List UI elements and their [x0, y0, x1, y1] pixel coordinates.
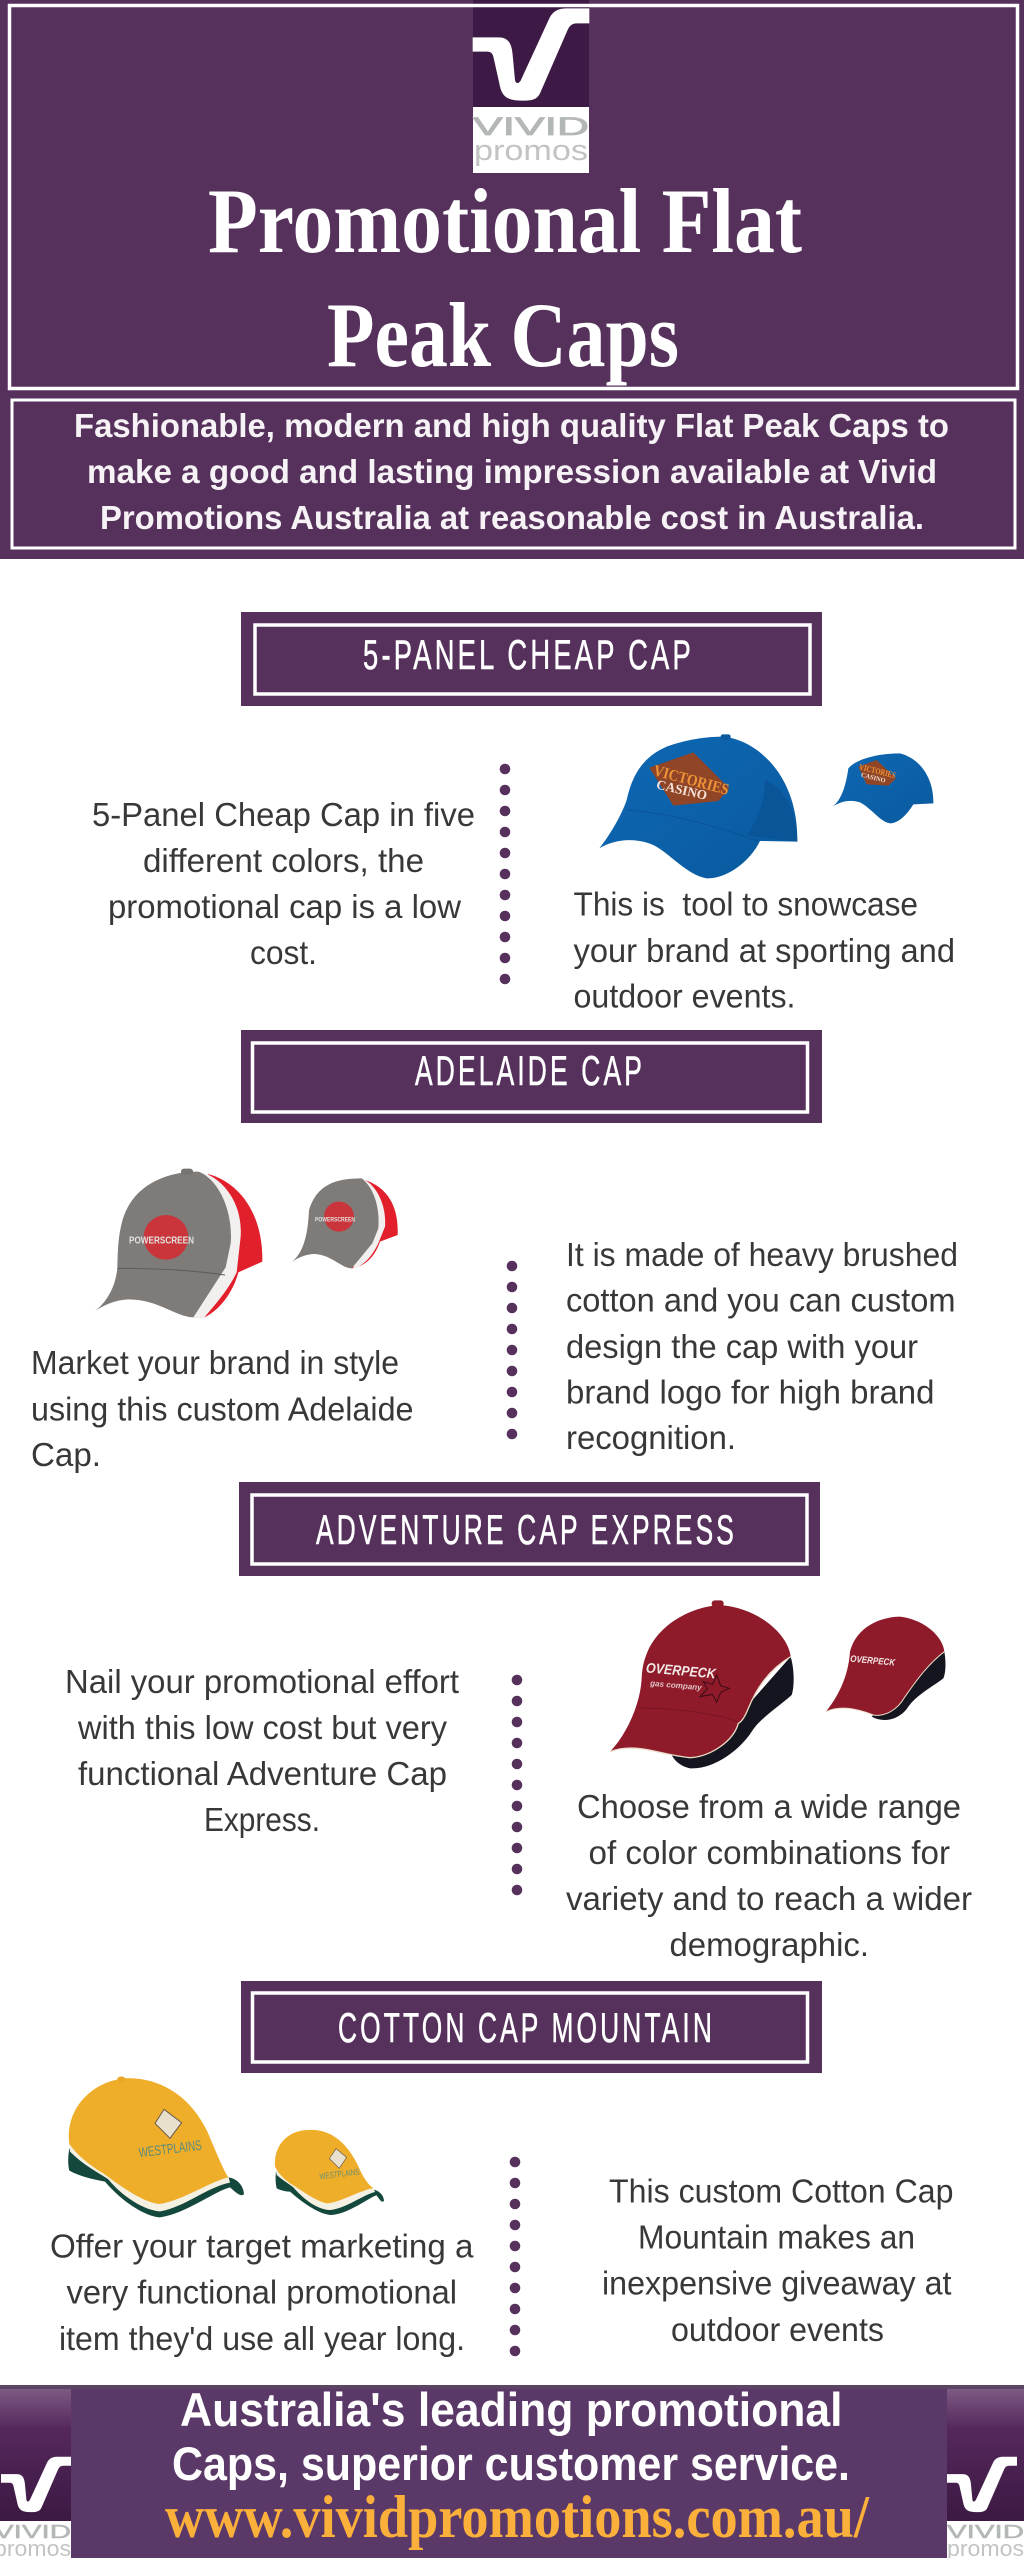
text: Adelaide left: using this custom Adelaide: [31, 1390, 414, 1428]
text: 5-Panel right: [574, 886, 955, 1014]
text: Cotton right: outdoor events: [671, 2311, 884, 2348]
text: Adelaide right: design the cap with your: [566, 1328, 918, 1365]
heading: 5-Panel Cheap Cap: [241, 612, 822, 706]
icon: grey red cap small: [292, 1178, 398, 1268]
text: Cotton left: very functional promotional: [66, 2274, 457, 2310]
icon: footer logo left: [0, 2389, 71, 2558]
footer tagline: Australia's leading promotional: [180, 2383, 842, 2436]
subtitle box: Fashionable, modern and high quality Flat Peak Caps to: [74, 407, 949, 444]
heading: Cotton Cap Mountain: COTTON CAP MOUNTAIN: [338, 2004, 715, 2051]
icon: maroon cap large: [610, 1600, 794, 1768]
icon: maroon cap small: [826, 1617, 945, 1720]
text: Adelaide right: [566, 1236, 958, 1456]
icon: maroon cap large: gas company: [649, 1679, 703, 1692]
text: 5-Panel left: promotional cap is a low: [108, 888, 461, 925]
text: Adelaide left: Market your brand in style: [31, 1344, 399, 1381]
icon: yellow cap small: WESTPLAINS: [319, 2166, 360, 2181]
dotted divider 2: [507, 1261, 517, 1439]
icon: grey red cap small: POWERSCREEN: [315, 1216, 355, 1223]
subtitle box: [12, 400, 1015, 548]
text: Adventure left: with this low cost but very: [77, 1709, 447, 1746]
text: Adelaide right: recognition.: [566, 1419, 736, 1456]
text: Cotton left: [50, 2228, 474, 2357]
footer url: www.vividpromotions.com.au/: [165, 2484, 870, 2550]
heading: Adventure Cap Express: [239, 1482, 820, 1576]
icon: Vivid Promos logo: [473, 0, 589, 173]
icon: yellow cap small: [275, 2130, 384, 2215]
icon: grey red cap large: [94, 1169, 262, 1317]
text: Adventure right: of color combinations for: [588, 1834, 950, 1871]
text: Cotton right: inexpensive giveaway at: [602, 2264, 952, 2302]
footer tagline: [172, 2383, 850, 2490]
text: Cotton left: item they'd use all year long.: [59, 2320, 465, 2357]
text: Adventure right: Choose from a wide range: [577, 1788, 961, 1825]
icon: blue cap large: CASINO: [655, 777, 709, 803]
text: 5-Panel right: your brand at sporting and: [574, 932, 955, 969]
icon: footer logo right: [947, 2389, 1024, 2558]
heading: Adventure Cap Express: ADVENTURE CAP EXPRESS: [316, 1506, 737, 1553]
text: Adelaide left: [31, 1344, 414, 1473]
title: Peak Caps: [327, 284, 679, 386]
text: Adventure right: variety and to reach a wider: [566, 1880, 972, 1917]
icon: yellow cap large: [68, 2077, 244, 2217]
icon: blue cap large: VICTORIES: [652, 762, 731, 799]
icon: footer logo right: VIVID: [947, 2522, 1024, 2542]
text: Cotton right: Mountain makes an: [638, 2218, 915, 2256]
text: Adelaide right: It is made of heavy brushed: [566, 1236, 958, 1273]
icon: grey red cap large: POWERSCREEN: [129, 1236, 194, 1247]
title: [208, 170, 802, 386]
text: Adventure left: Nail your promotional effort: [65, 1663, 459, 1700]
icon: blue cap small: VICTORIES: [858, 762, 897, 780]
text: Adelaide left: Cap.: [31, 1436, 101, 1473]
icon: Vivid Promos logo: VIVID: [473, 113, 589, 141]
dotted divider 3: [512, 1675, 522, 1895]
text: Adventure right: [566, 1788, 972, 1963]
text: Adelaide right: brand logo for high brand: [566, 1374, 934, 1410]
text: 5-Panel left: different colors, the: [143, 842, 424, 879]
icon: yellow cap large: WESTPLAINS: [138, 2137, 203, 2160]
text: Cotton right: [602, 2172, 954, 2348]
subtitle box: Promotions Australia at reasonable cost in Australia.: [100, 499, 924, 536]
text: Adelaide right: cotton and you can custom: [566, 1282, 956, 1318]
text: Cotton right: This custom Cotton Cap: [609, 2172, 954, 2210]
panel: footer: [0, 2383, 1024, 2558]
heading: Adelaide Cap: [241, 1030, 822, 1123]
icon: blue cap small: CASINO: [860, 772, 886, 785]
header outer frame: [10, 6, 1018, 388]
text: Adventure left: Express.: [204, 1801, 320, 1838]
text: Adventure left: functional Adventure Cap: [78, 1755, 447, 1792]
icon: maroon cap large: OVERPECK: [645, 1659, 717, 1681]
icon: blue cap small: [832, 753, 933, 823]
subtitle box: make a good and lasting impression available at Vivid: [87, 453, 937, 490]
text: Cotton left: Offer your target marketing a: [50, 2228, 474, 2264]
text: 5-Panel left: 5-Panel Cheap Cap in five: [92, 796, 475, 833]
heading: Cotton Cap Mountain: [241, 1981, 822, 2073]
dotted divider 1: [500, 764, 510, 984]
text: Adventure right: demographic.: [670, 1926, 869, 1963]
text: 5-Panel right: This is tool to snowcase: [574, 886, 918, 922]
text: Adventure left: [65, 1663, 459, 1838]
text: 5-Panel left: cost.: [250, 934, 317, 971]
title: Promotional Flat: [208, 170, 802, 272]
heading: Adelaide Cap: ADELAIDE CAP: [415, 1047, 645, 1094]
dotted divider 4: [510, 2157, 520, 2356]
icon: maroon cap small: OVERPECK: [850, 1654, 897, 1668]
heading: 5-Panel Cheap Cap: 5-PANEL CHEAP CAP: [363, 631, 694, 678]
icon: Vivid Promos logo: promos: [474, 135, 588, 167]
panel: header: [0, 0, 1024, 559]
text: 5-Panel right: outdoor events.: [574, 978, 796, 1014]
text: 5-Panel left: [92, 796, 475, 971]
icon: blue cap large: [599, 734, 797, 878]
footer tagline: Caps, superior customer service.: [172, 2437, 850, 2490]
